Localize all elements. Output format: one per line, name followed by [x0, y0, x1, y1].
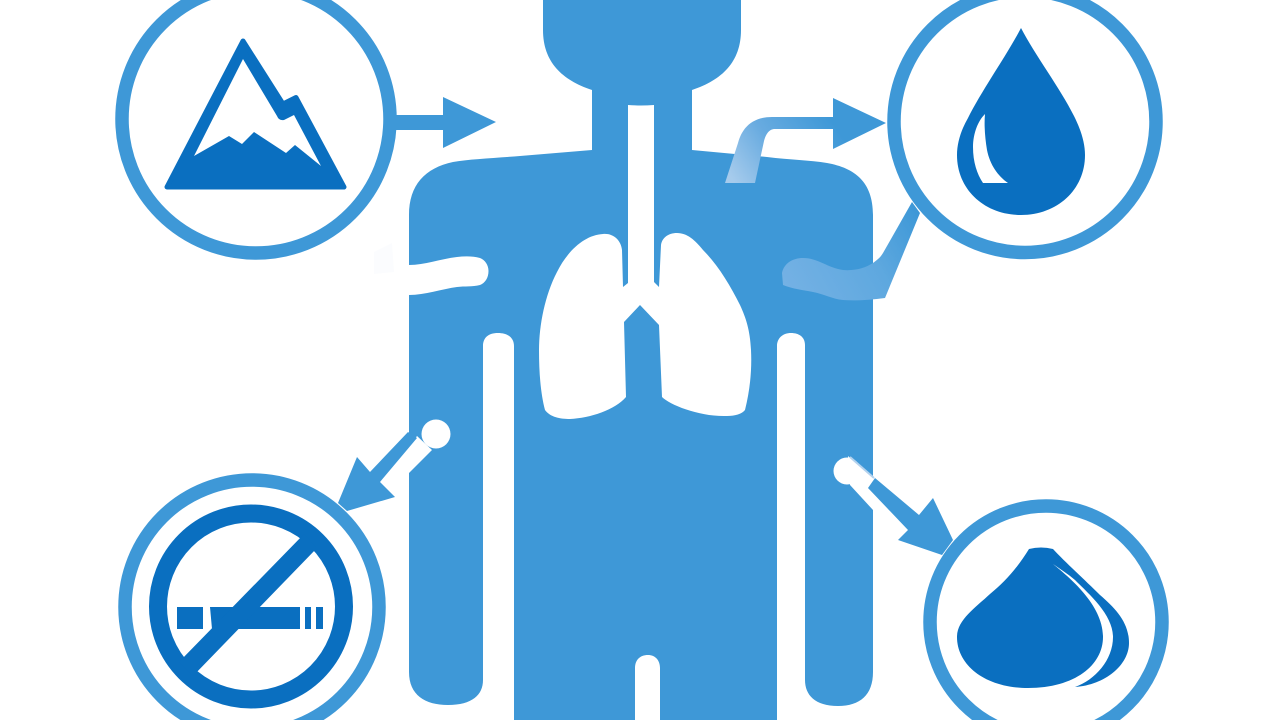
- faint smudge left of arm: [374, 243, 394, 274]
- circle: no smoking: [125, 480, 379, 720]
- icon: water drop: [957, 28, 1085, 215]
- circle: water drop: [894, 0, 1156, 252]
- arrow: body to no smoking: [338, 420, 450, 511]
- human body silhouette: [409, 0, 873, 720]
- circle: oil drop: [930, 506, 1162, 720]
- circle: mountain: [122, 0, 390, 253]
- icon: oil drop: [957, 548, 1129, 688]
- arrow: body to water drop: [725, 98, 886, 183]
- white band across left arm: [409, 256, 488, 295]
- lungs and windpipe: [539, 105, 751, 419]
- arrow: body to oil drop: [834, 456, 953, 555]
- icon: mountain: [167, 41, 344, 187]
- icon: no smoking: [158, 514, 344, 700]
- arrow: mountain to body: [390, 97, 496, 148]
- connector: lung to water drop: [782, 202, 920, 300]
